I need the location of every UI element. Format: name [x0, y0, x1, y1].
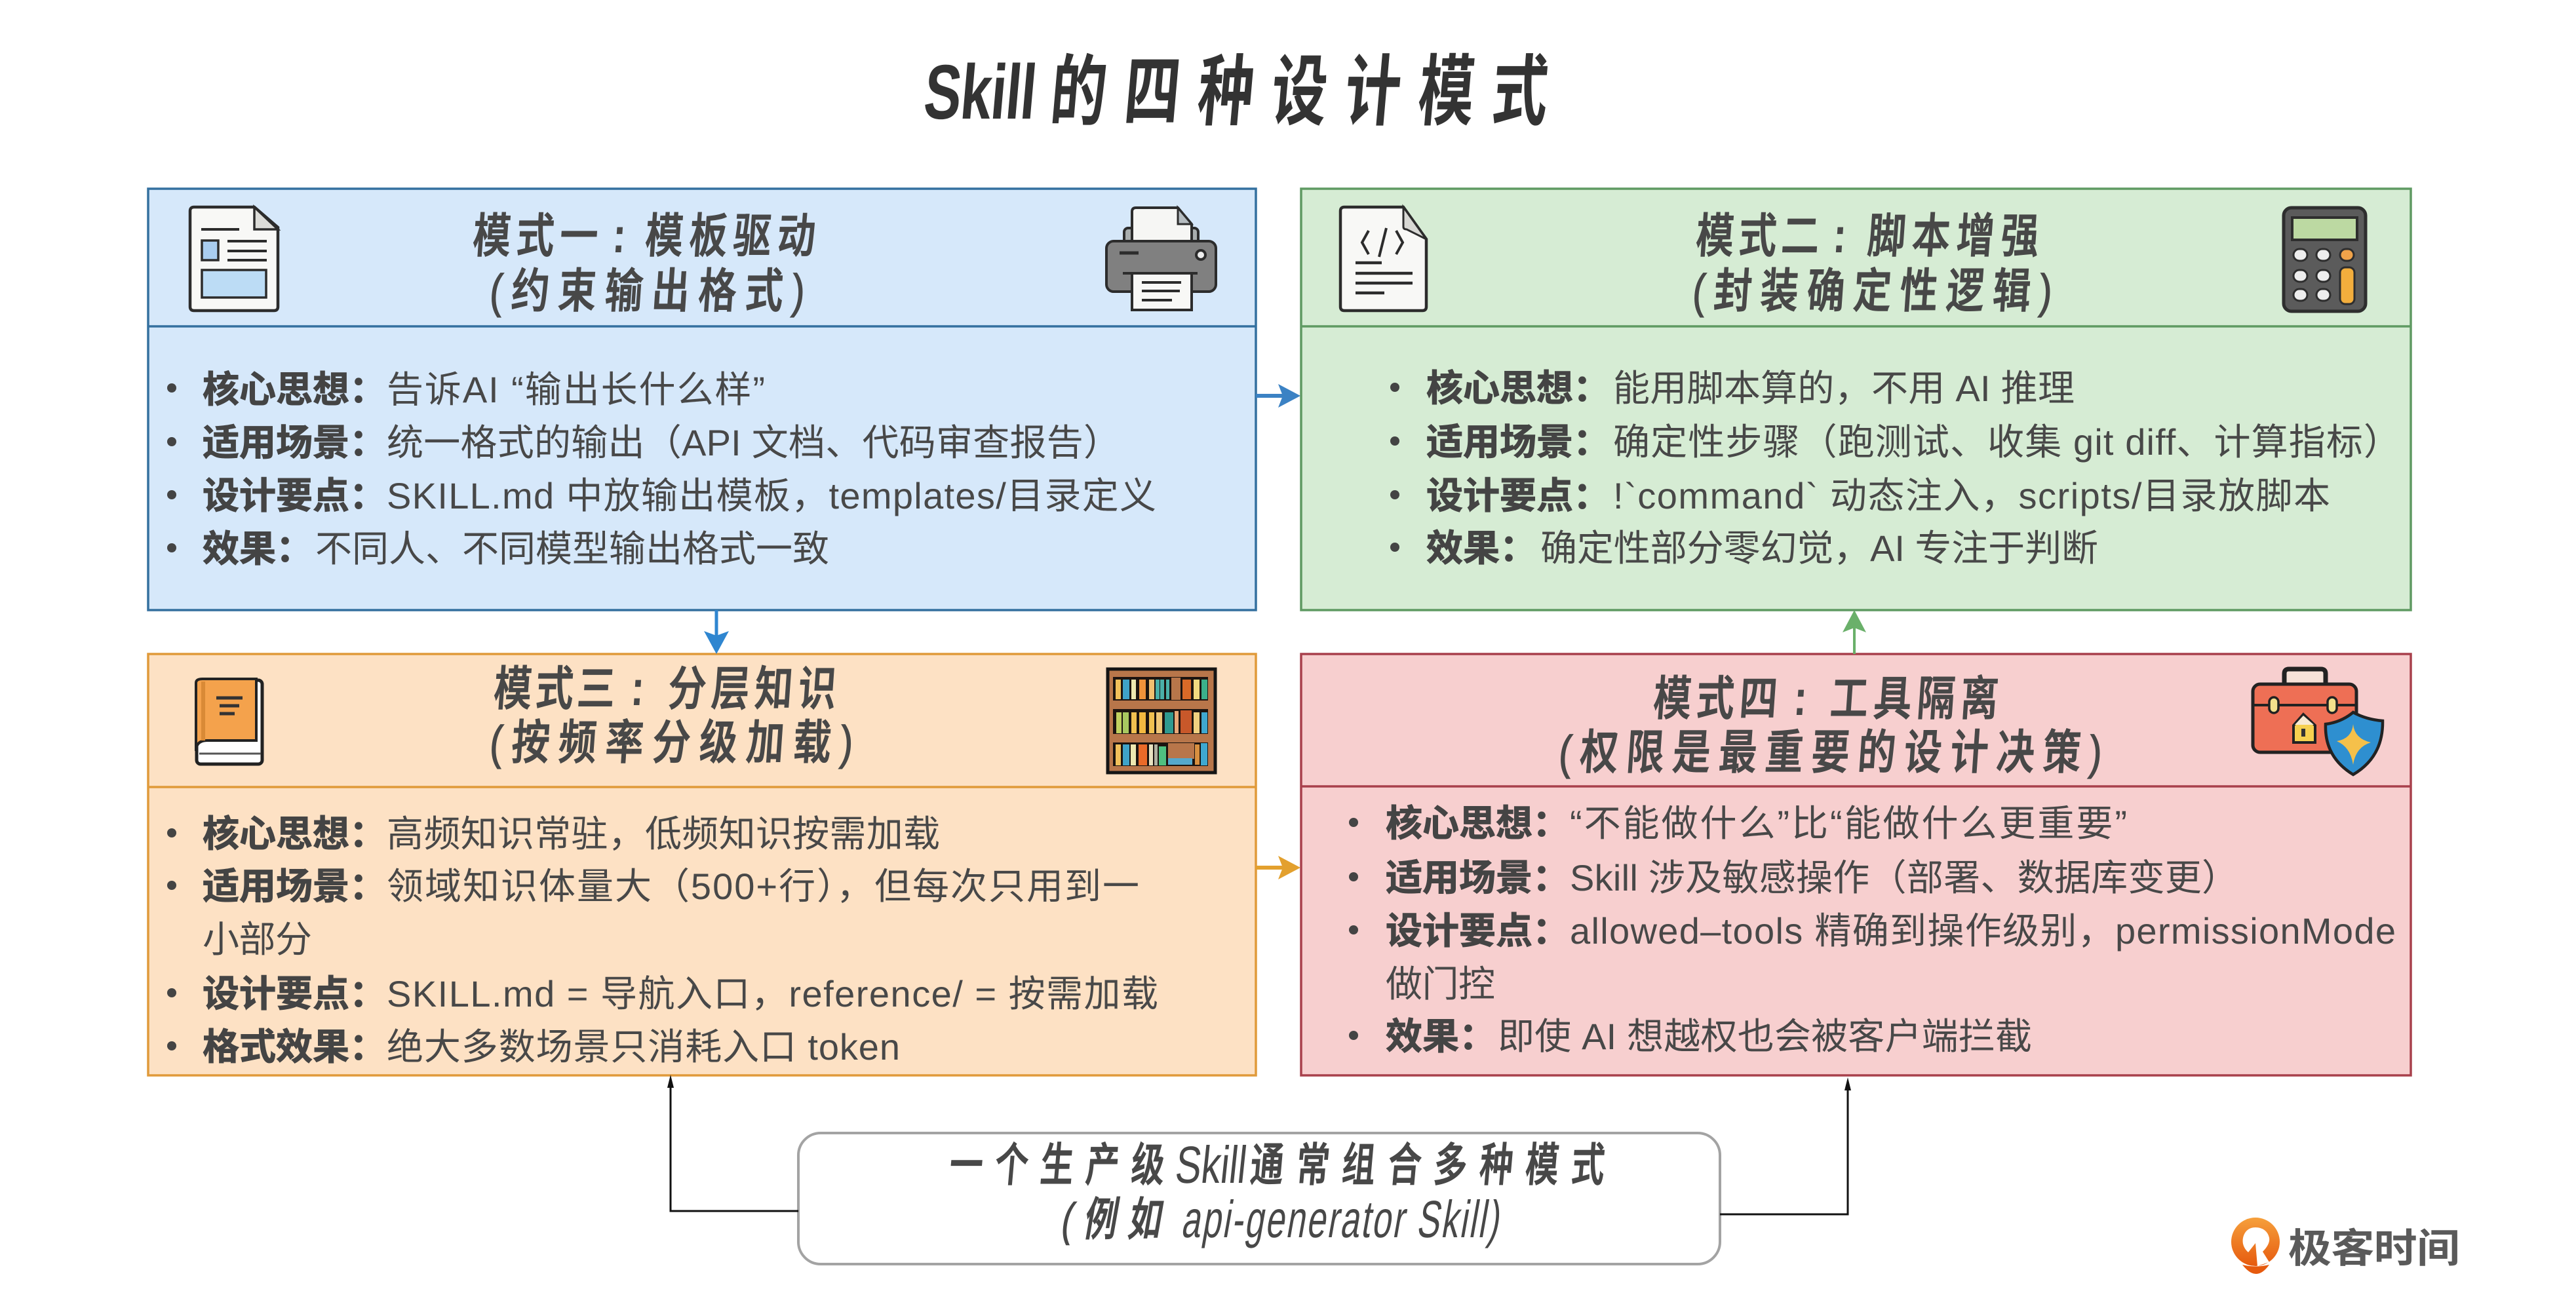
icon: calculator	[2284, 208, 2366, 311]
heading: mode 1: 模板驱动	[644, 210, 817, 262]
heading: mode 2: 模式二	[1694, 210, 1822, 262]
bullet list: mode 1: SKILL.md 中放输出模板，templates/目录定义	[387, 475, 1156, 516]
bullet list: mode 2: 确定性步骤（跑测试、收集 git diff、计算指标）	[1613, 421, 2400, 463]
heading: mode 3: 分层知识	[667, 663, 838, 715]
bullet list: mode 2: 效果：	[1426, 528, 1536, 569]
bullet list: mode 2: 适用场景：	[1426, 421, 1610, 463]
heading: mode 2: (封装确定性逻辑)	[1691, 265, 2054, 317]
heading: mode 1: :	[611, 208, 628, 263]
heading: mode 3	[488, 661, 855, 769]
title: Skill	[921, 49, 1040, 135]
summary box: (例如	[1058, 1195, 1167, 1246]
bullet list: mode 3: 格式效果：	[203, 1026, 386, 1068]
bullet list: mode 3: 小部分	[203, 919, 312, 960]
panel: mode 3 layered knowledge	[148, 654, 1256, 1075]
bullet list: mode 4: Skill 涉及敏感操作（部署、数据库变更）	[1570, 857, 2238, 898]
summary box: api-generator Skill)	[1179, 1190, 1506, 1249]
icon: document template	[190, 207, 278, 311]
bullet list: mode 1: 不同人、不同模型输出格式一致	[315, 528, 829, 569]
bullet list: mode 3: 核心思想：	[203, 813, 386, 855]
bullet list: mode 2: 确定性部分零幻觉，AI 专注于判断	[1540, 528, 2098, 569]
icon: code document	[1340, 207, 1426, 311]
heading: mode 4	[1557, 670, 2104, 779]
bullet list: mode 3: 领域知识体量大（500+行），但每次只用到一	[387, 866, 1139, 907]
bullet list: mode 2	[1390, 368, 2400, 569]
bullet list: mode 1: 核心思想：	[203, 369, 386, 410]
heading: mode 2: 脚本增强	[1866, 210, 2040, 262]
heading: mode 3: (按频率分级加载)	[488, 716, 855, 769]
arrow: summary to mode 4	[1720, 1077, 1851, 1214]
arrow: mode 1 to mode 3	[704, 610, 729, 654]
summary box: 通常组合多种模式	[1249, 1140, 1607, 1191]
arrow: summary to mode 3	[667, 1075, 798, 1211]
summary box: Skill	[1173, 1136, 1250, 1194]
bullet list: mode 4: 即使 AI 想越权也会被客户端拦截	[1498, 1016, 2032, 1057]
heading: mode 3: :	[629, 661, 646, 716]
bullet list: mode 1: 告诉AI “输出长什么样”	[387, 369, 765, 410]
title: 的四种设计模式	[1047, 49, 1551, 135]
icon: printer	[1106, 208, 1216, 310]
bullet list: mode 3: 绝大多数场景只消耗入口 token	[387, 1026, 900, 1068]
panel: mode 2 script enhanced	[1301, 189, 2411, 610]
bullet list: mode 1	[167, 369, 1156, 569]
bullet list: mode 4: 设计要点：	[1386, 910, 1569, 952]
bullet list: mode 3: 高频知识常驻，低频知识按需加载	[387, 813, 940, 855]
bullet list: mode 4	[1349, 803, 2396, 1057]
bullet list: mode 4: 核心思想：	[1386, 803, 1569, 844]
summary box	[798, 1133, 1720, 1264]
bullet list: mode 4: 效果：	[1386, 1016, 1496, 1057]
heading: mode 3: 模式三	[492, 663, 617, 715]
summary box: 一个生产级	[948, 1140, 1167, 1191]
bullet list: mode 1: 适用场景：	[203, 422, 386, 463]
logo: geektime	[2229, 1218, 2460, 1274]
arrow: mode 3 to mode 4	[1256, 856, 1300, 879]
heading: mode 2	[1691, 208, 2054, 317]
icon: bookshelf	[1108, 669, 1215, 773]
logo: geektime: 极客时间	[2288, 1227, 2460, 1271]
heading: mode 4: 工具隔离	[1829, 672, 2000, 725]
bullet list: mode 1: 设计要点：	[203, 475, 386, 516]
bullet list: mode 2: !`command` 动态注入，scripts/目录放脚本	[1613, 475, 2330, 516]
bullet list: mode 3: 设计要点：	[203, 973, 386, 1014]
heading: mode 4: :	[1792, 670, 1809, 726]
bullet list: mode 2: 核心思想：	[1426, 368, 1610, 409]
heading: mode 4: (权限是最重要的设计决策)	[1557, 726, 2104, 779]
bullet list: mode 3: SKILL.md = 导航入口，reference/ = 按需加载	[387, 973, 1158, 1014]
arrow: mode 4 to mode 2	[1843, 610, 1866, 654]
bullet list: mode 2: 设计要点：	[1426, 475, 1610, 516]
heading: mode 2: :	[1831, 208, 1848, 263]
bullet list: mode 3: 适用场景：	[203, 866, 386, 907]
arrow: mode 1 to mode 2	[1256, 384, 1300, 408]
bullet list: mode 4: 做门控	[1386, 963, 1495, 1005]
bullet list: mode 1: 效果：	[203, 528, 313, 569]
heading: mode 1: (约束输出格式)	[488, 265, 807, 317]
panel: mode 4 tool isolation	[1301, 654, 2411, 1075]
bullet list: mode 2: 能用脚本算的，不用 AI 推理	[1613, 368, 2075, 409]
bullet list: mode 3	[167, 813, 1158, 1068]
heading: mode 4: 模式四	[1652, 672, 1779, 725]
icon: toolbox with shield	[2253, 669, 2383, 775]
heading: mode 1: 模式一	[471, 210, 600, 262]
heading: mode 1	[471, 208, 817, 317]
panel: mode 1 template driven	[148, 189, 1256, 610]
bullet list: mode 4: 适用场景：	[1386, 857, 1569, 898]
bullet list: mode 1: 统一格式的输出（API 文档、代码审查报告）	[387, 422, 1120, 463]
icon: book	[196, 679, 262, 764]
bullet list: mode 4: allowed–tools 精确到操作级别，permissionMode	[1570, 910, 2396, 952]
bullet list: mode 4: “不能做什么”比“能做什么更重要”	[1570, 803, 2127, 844]
